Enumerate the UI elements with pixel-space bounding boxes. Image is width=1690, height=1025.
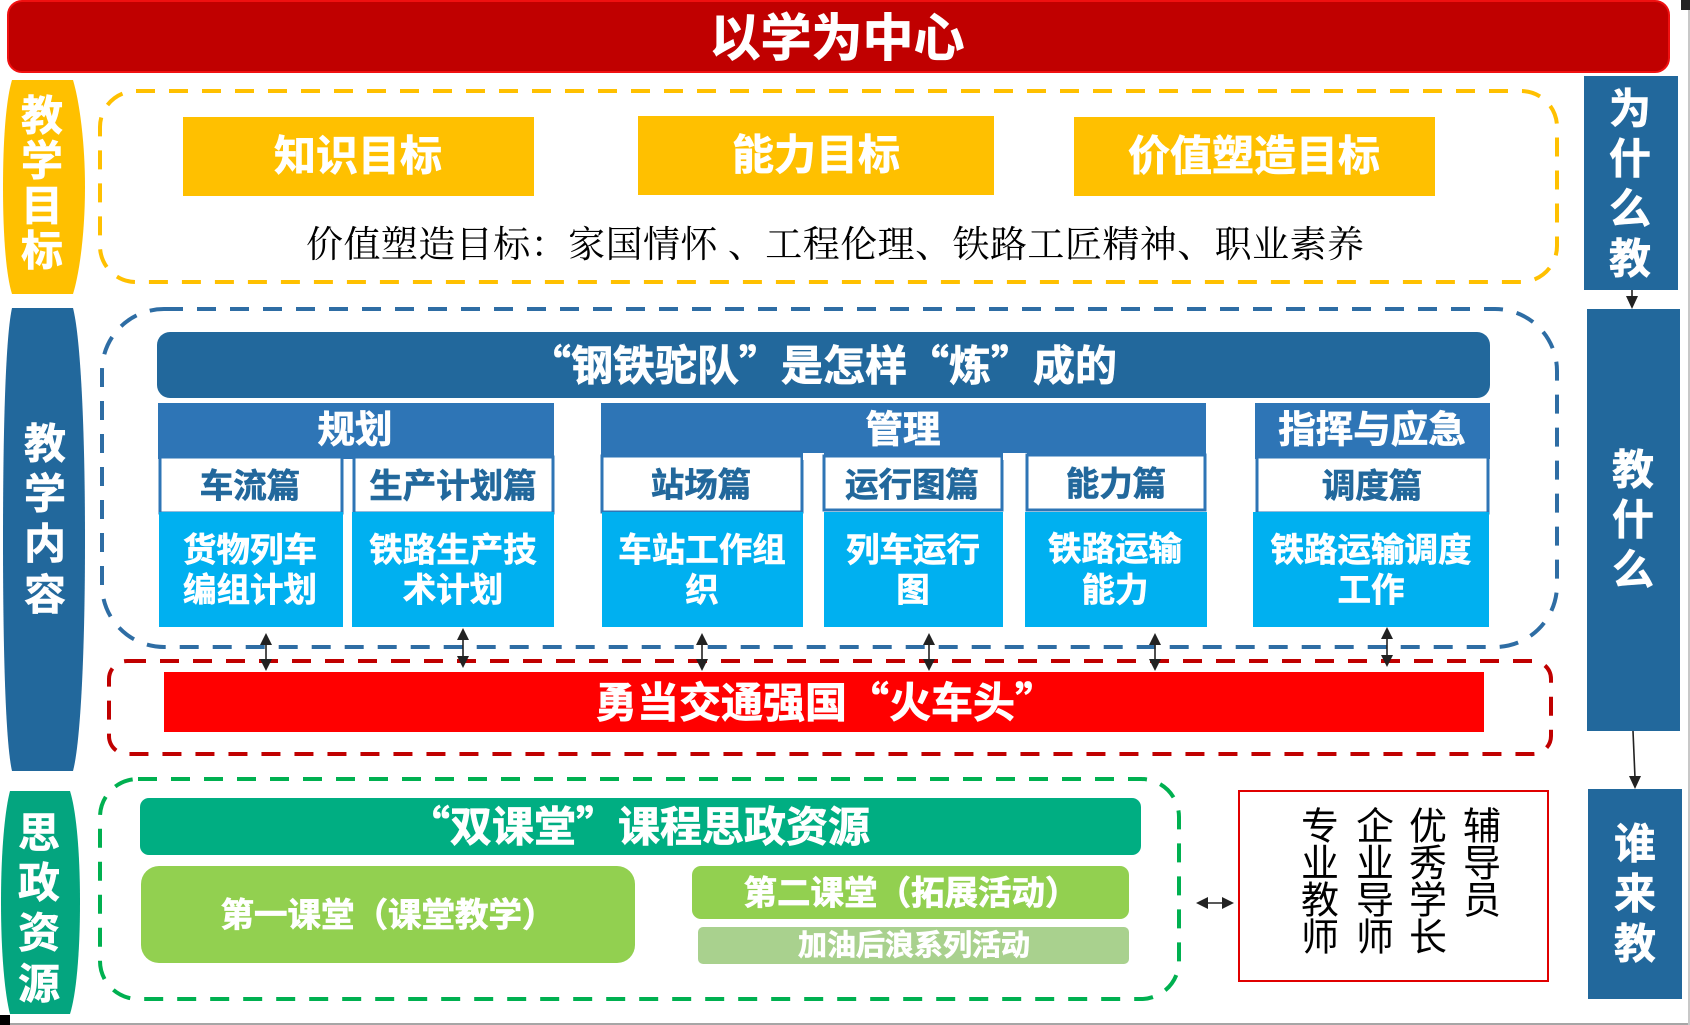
chapter: capacity — [1003, 453, 1205, 510]
teacher type: enterprise mentors: 业 — [1356, 832, 1394, 888]
teacher type: outstanding seniors — [1409, 796, 1447, 962]
first classroom — [141, 866, 635, 963]
activity series: 加油后浪系列活动 — [798, 922, 1030, 964]
chapter: traffic flow — [160, 457, 342, 513]
goal box: value shaping — [1074, 117, 1435, 196]
chapter: dispatching: 调度篇 — [1322, 458, 1422, 508]
title banner — [8, 0, 1669, 72]
side label: teaching goals: 标 — [21, 218, 63, 278]
content heading — [157, 332, 1490, 398]
teacher type: enterprise mentors: 企 — [1356, 796, 1394, 850]
chapter: production plan: 生产计划篇 — [369, 458, 537, 508]
arrow: resources to teachers — [1196, 897, 1234, 909]
side box: who teaches: 教 — [1614, 910, 1656, 972]
side label: ideological resources: 资 — [18, 900, 60, 960]
topic: marshalling plan: 货物列车 — [183, 522, 317, 572]
side label: teaching content: 学 — [24, 460, 66, 522]
activity series — [698, 922, 1129, 964]
topic: production technical plan — [352, 512, 554, 627]
mission bar: 勇当交通强国“火车头” — [595, 670, 1057, 730]
topic: train diagram: 列车运行 — [846, 522, 980, 572]
side box: who teaches — [1588, 789, 1682, 999]
chapter: station yard — [602, 456, 802, 512]
teacher type: counselors: 辅 — [1463, 796, 1501, 850]
teacher type: professional teachers: 师 — [1301, 906, 1339, 962]
teacher type: professional teachers: 教 — [1301, 870, 1339, 924]
side box: why teach: 么 — [1609, 176, 1651, 236]
side label: ideological resources: 思 — [18, 800, 60, 860]
topic: dispatching work: 铁路运输调度 — [1270, 522, 1472, 572]
side label: teaching content: 内 — [24, 510, 66, 572]
topic: marshalling plan: 编组计划 — [183, 562, 317, 612]
goal box: ability — [638, 116, 994, 195]
first classroom: 第一课堂（课堂教学） — [220, 888, 556, 936]
category: planning — [158, 398, 554, 459]
second classroom: 第二课堂（拓展活动） — [744, 866, 1078, 914]
arrow: what to who — [1629, 731, 1641, 789]
teacher type: outstanding seniors: 优 — [1409, 796, 1447, 850]
side label: teaching content — [3, 308, 85, 771]
topic: station work organization: 织 — [685, 562, 719, 612]
chapter: traffic flow: 车流篇 — [200, 458, 300, 508]
teacher type: professional teachers: 专 — [1301, 796, 1339, 850]
topic: production technical plan: 铁路生产技 — [369, 522, 537, 572]
panel: teaching content — [102, 309, 1557, 647]
value shaping description: 价值塑造目标：家国情怀 、工程伦理、铁路工匠精神、职业素养 — [306, 214, 1364, 268]
chapter: dispatching — [1257, 457, 1488, 513]
teacher type: counselors — [1463, 796, 1501, 924]
goal box: knowledge — [183, 117, 534, 196]
panel: teaching goals — [100, 91, 1557, 282]
topic: transport capacity: 能力 — [1082, 562, 1148, 612]
side label: ideological resources — [1, 791, 80, 1014]
side label: teaching goals: 目 — [21, 172, 63, 234]
side label: teaching goals — [3, 80, 85, 294]
category: management — [601, 398, 1206, 459]
chapter: station yard: 站场篇 — [651, 458, 751, 506]
panel: locomotive mission — [109, 661, 1551, 754]
panel: ideological resources — [100, 779, 1179, 999]
mission bar — [164, 670, 1484, 732]
side box: why teach — [1584, 76, 1678, 290]
topic: production technical plan: 术计划 — [403, 562, 503, 612]
chapter: train diagram: 运行图篇 — [845, 458, 979, 506]
goal box: knowledge: 知识目标 — [274, 122, 442, 184]
category: command and emergency: 指挥与应急 — [1278, 398, 1466, 454]
teacher type: professional teachers: 业 — [1301, 832, 1339, 888]
side label: teaching goals: 教 — [21, 82, 63, 144]
side box: what to teach: 么 — [1612, 536, 1654, 598]
chapter: train diagram — [803, 453, 1002, 510]
topic: transport capacity: 铁路运输 — [1048, 522, 1182, 570]
teacher type: outstanding seniors: 长 — [1409, 906, 1447, 962]
topic: station work organization: 车站工作组 — [618, 522, 786, 572]
side box: what to teach: 什 — [1612, 486, 1654, 548]
chapter: capacity: 能力篇 — [1066, 456, 1166, 506]
teacher type: enterprise mentors — [1356, 796, 1394, 962]
arrow: link 4 — [923, 633, 935, 671]
arrow: link 3 — [696, 633, 708, 671]
side box: what to teach — [1587, 309, 1680, 731]
side box: why teach: 什 — [1609, 126, 1651, 186]
arrow: link 1 — [260, 633, 272, 671]
side box: why teach: 教 — [1609, 226, 1651, 286]
panel: teachers — [1239, 791, 1548, 981]
topic: train diagram: 图 — [896, 562, 930, 612]
side label: teaching content: 教 — [24, 410, 66, 472]
category: planning: 规划 — [318, 398, 392, 454]
teacher type: enterprise mentors: 导 — [1356, 870, 1394, 924]
side box: what to teach: 教 — [1612, 436, 1654, 498]
resources heading: “双课堂”课程思政资源 — [408, 794, 870, 854]
side label: ideological resources: 政 — [18, 850, 60, 910]
topic: transport capacity — [1025, 512, 1207, 627]
topic: marshalling plan — [159, 512, 343, 627]
topic: dispatching work: 工作 — [1338, 562, 1404, 612]
arrow: why to what — [1626, 290, 1638, 309]
teacher type: outstanding seniors: 秀 — [1409, 832, 1447, 888]
topic: train diagram — [824, 512, 1003, 627]
side label: teaching content: 容 — [24, 562, 66, 622]
goal box: ability: 能力目标 — [732, 122, 900, 182]
side label: teaching goals: 学 — [21, 128, 63, 188]
teacher type: outstanding seniors: 学 — [1409, 870, 1447, 924]
content heading: “钢铁驼队”是怎样“炼”成的 — [529, 332, 1117, 394]
teacher type: enterprise mentors: 师 — [1356, 906, 1394, 962]
arrow: link 5 — [1149, 633, 1161, 671]
teacher type: counselors: 员 — [1463, 870, 1501, 924]
side label: ideological resources: 源 — [18, 950, 60, 1012]
side box: why teach: 为 — [1609, 76, 1651, 136]
arrow: link 6 — [1381, 627, 1393, 667]
side box: who teaches: 谁 — [1614, 810, 1656, 872]
side box: who teaches: 来 — [1614, 860, 1656, 922]
topic: dispatching work — [1253, 512, 1489, 627]
goal box: value shaping: 价值塑造目标 — [1128, 122, 1380, 184]
teacher type: counselors: 导 — [1463, 832, 1501, 888]
resources heading — [140, 794, 1141, 855]
category: management: 管理 — [866, 398, 940, 454]
topic: station work organization — [602, 512, 803, 627]
arrow: link 2 — [457, 628, 469, 668]
teacher type: professional teachers — [1301, 796, 1339, 962]
